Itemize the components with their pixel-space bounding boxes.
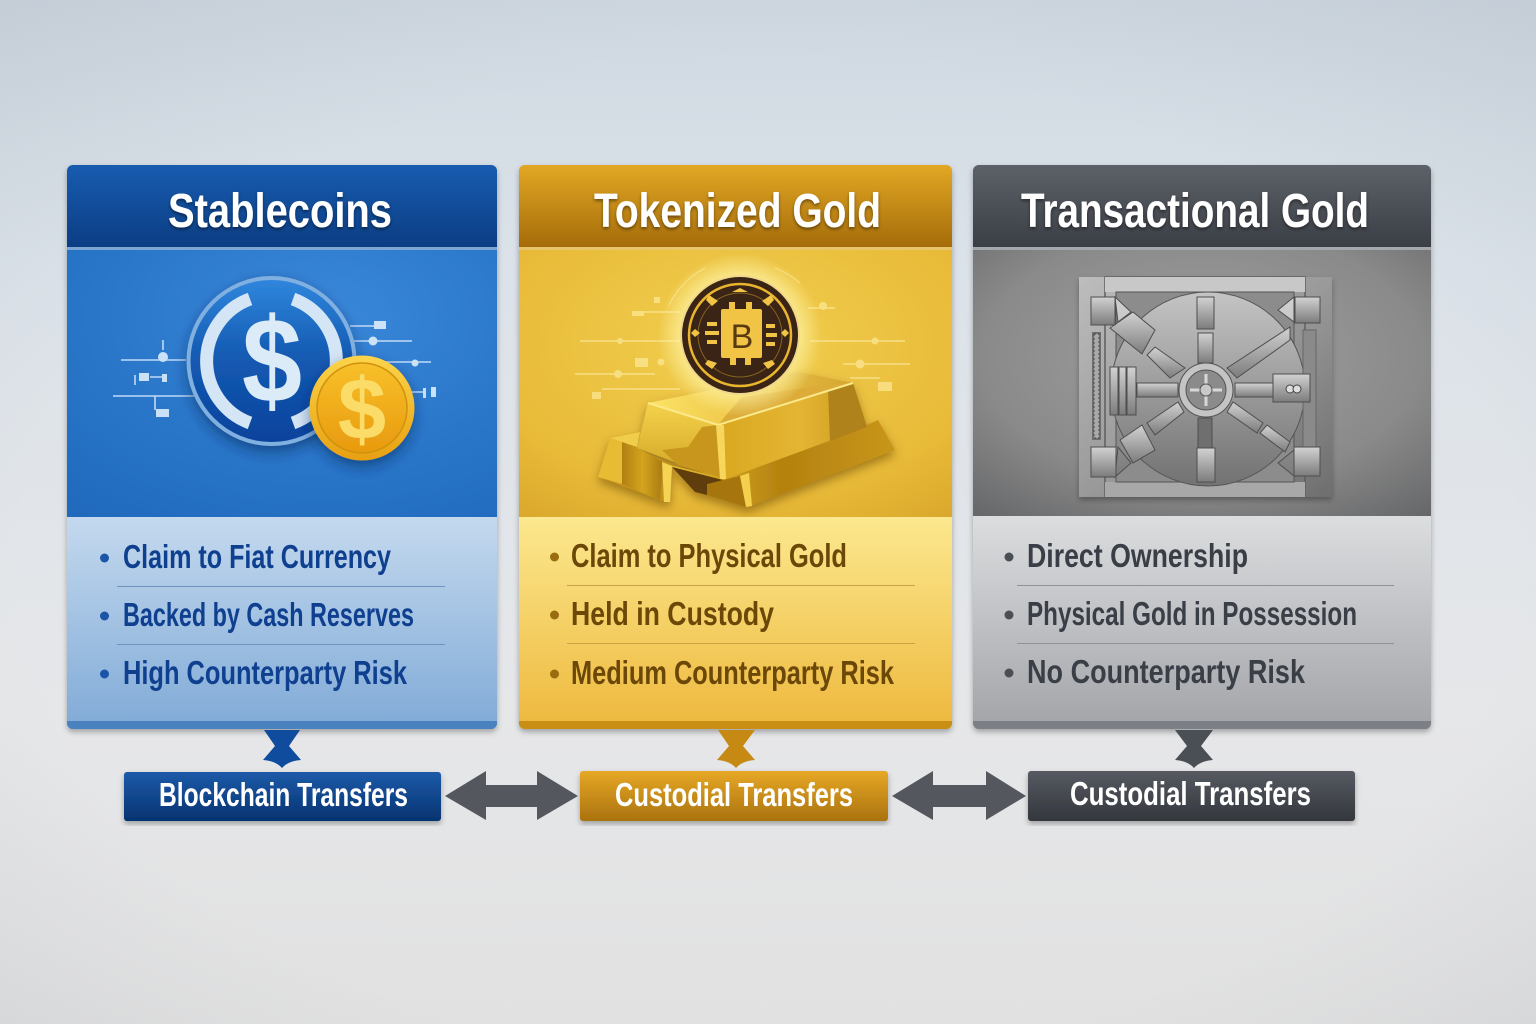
- label: blockchain transfers: Blockchain Transfers: [159, 776, 408, 813]
- bullet item: Backed by Cash Reserves: [123, 596, 414, 633]
- transactional gold header: Transactional Gold: [1021, 185, 1369, 238]
- panel: tokenized gold: [519, 165, 952, 729]
- icon: vault door: [1079, 277, 1332, 497]
- stablecoins header: Stablecoins: [168, 185, 392, 238]
- tokenized gold header: Tokenized Gold: [594, 185, 881, 238]
- arrow: double between blockchain and custodial: [445, 771, 578, 820]
- lower left bar: [598, 432, 672, 502]
- transactional gold illustration area: [973, 250, 1431, 516]
- connector: blue: [263, 730, 301, 768]
- tokenized gold illustration area: [519, 250, 952, 517]
- vault wheel: [1179, 363, 1233, 417]
- label: custodial transfers gold: [580, 771, 888, 821]
- circuit lines: [575, 268, 910, 399]
- icon: gold dollar coin: $: [338, 361, 386, 458]
- bullet item: Claim to Fiat Currency: [123, 538, 391, 575]
- icon: blue dollar coin: $: [242, 292, 302, 428]
- arrow: double between custodial labels: [892, 771, 1026, 820]
- tokenized gold list: [519, 517, 952, 729]
- panel: stablecoins: [67, 165, 497, 729]
- bullet item: Direct Ownership: [1027, 537, 1248, 574]
- circuit lines left: [113, 340, 194, 417]
- icon: blue dollar coin: [186, 276, 356, 446]
- bullet item: Physical Gold in Possession: [1027, 595, 1357, 632]
- tokenized gold header: [519, 165, 952, 250]
- label: custodial transfers gray: Custodial Transfers: [1070, 775, 1311, 812]
- stablecoins illustration area: [67, 250, 497, 517]
- stablecoins list: [67, 517, 497, 729]
- transactional gold header: [973, 165, 1431, 250]
- bullet item: Medium Counterparty Risk: [571, 654, 894, 691]
- bullet item: No Counterparty Risk: [1027, 653, 1306, 690]
- upper bar: [637, 372, 867, 480]
- connector: gray: [1175, 730, 1213, 768]
- panel: transactional gold: [973, 165, 1431, 729]
- transactional gold list: [973, 516, 1431, 729]
- bullet item: Held in Custody: [571, 595, 775, 632]
- label: custodial transfers gray: [1028, 771, 1355, 821]
- icon: token coin: [658, 253, 822, 417]
- vault disc: [1111, 292, 1305, 486]
- icon: gold bars: [598, 372, 895, 507]
- bullet item: [1004, 595, 1357, 632]
- icon: token coin: B: [731, 318, 753, 356]
- bullet item: [100, 596, 414, 633]
- label: custodial transfers gold: Custodial Transfers: [615, 776, 853, 813]
- vault bars and bolts: [1091, 297, 1320, 482]
- stablecoins header: [67, 165, 497, 250]
- connector: gold: [717, 730, 755, 768]
- icon: gold dollar coin: [310, 356, 414, 460]
- lower right bar: [670, 420, 895, 507]
- bullet item: Claim to Physical Gold: [571, 537, 847, 574]
- label: blockchain transfers: [124, 772, 441, 821]
- circuit lines right: [350, 321, 436, 398]
- bullet item: High Counterparty Risk: [123, 654, 407, 691]
